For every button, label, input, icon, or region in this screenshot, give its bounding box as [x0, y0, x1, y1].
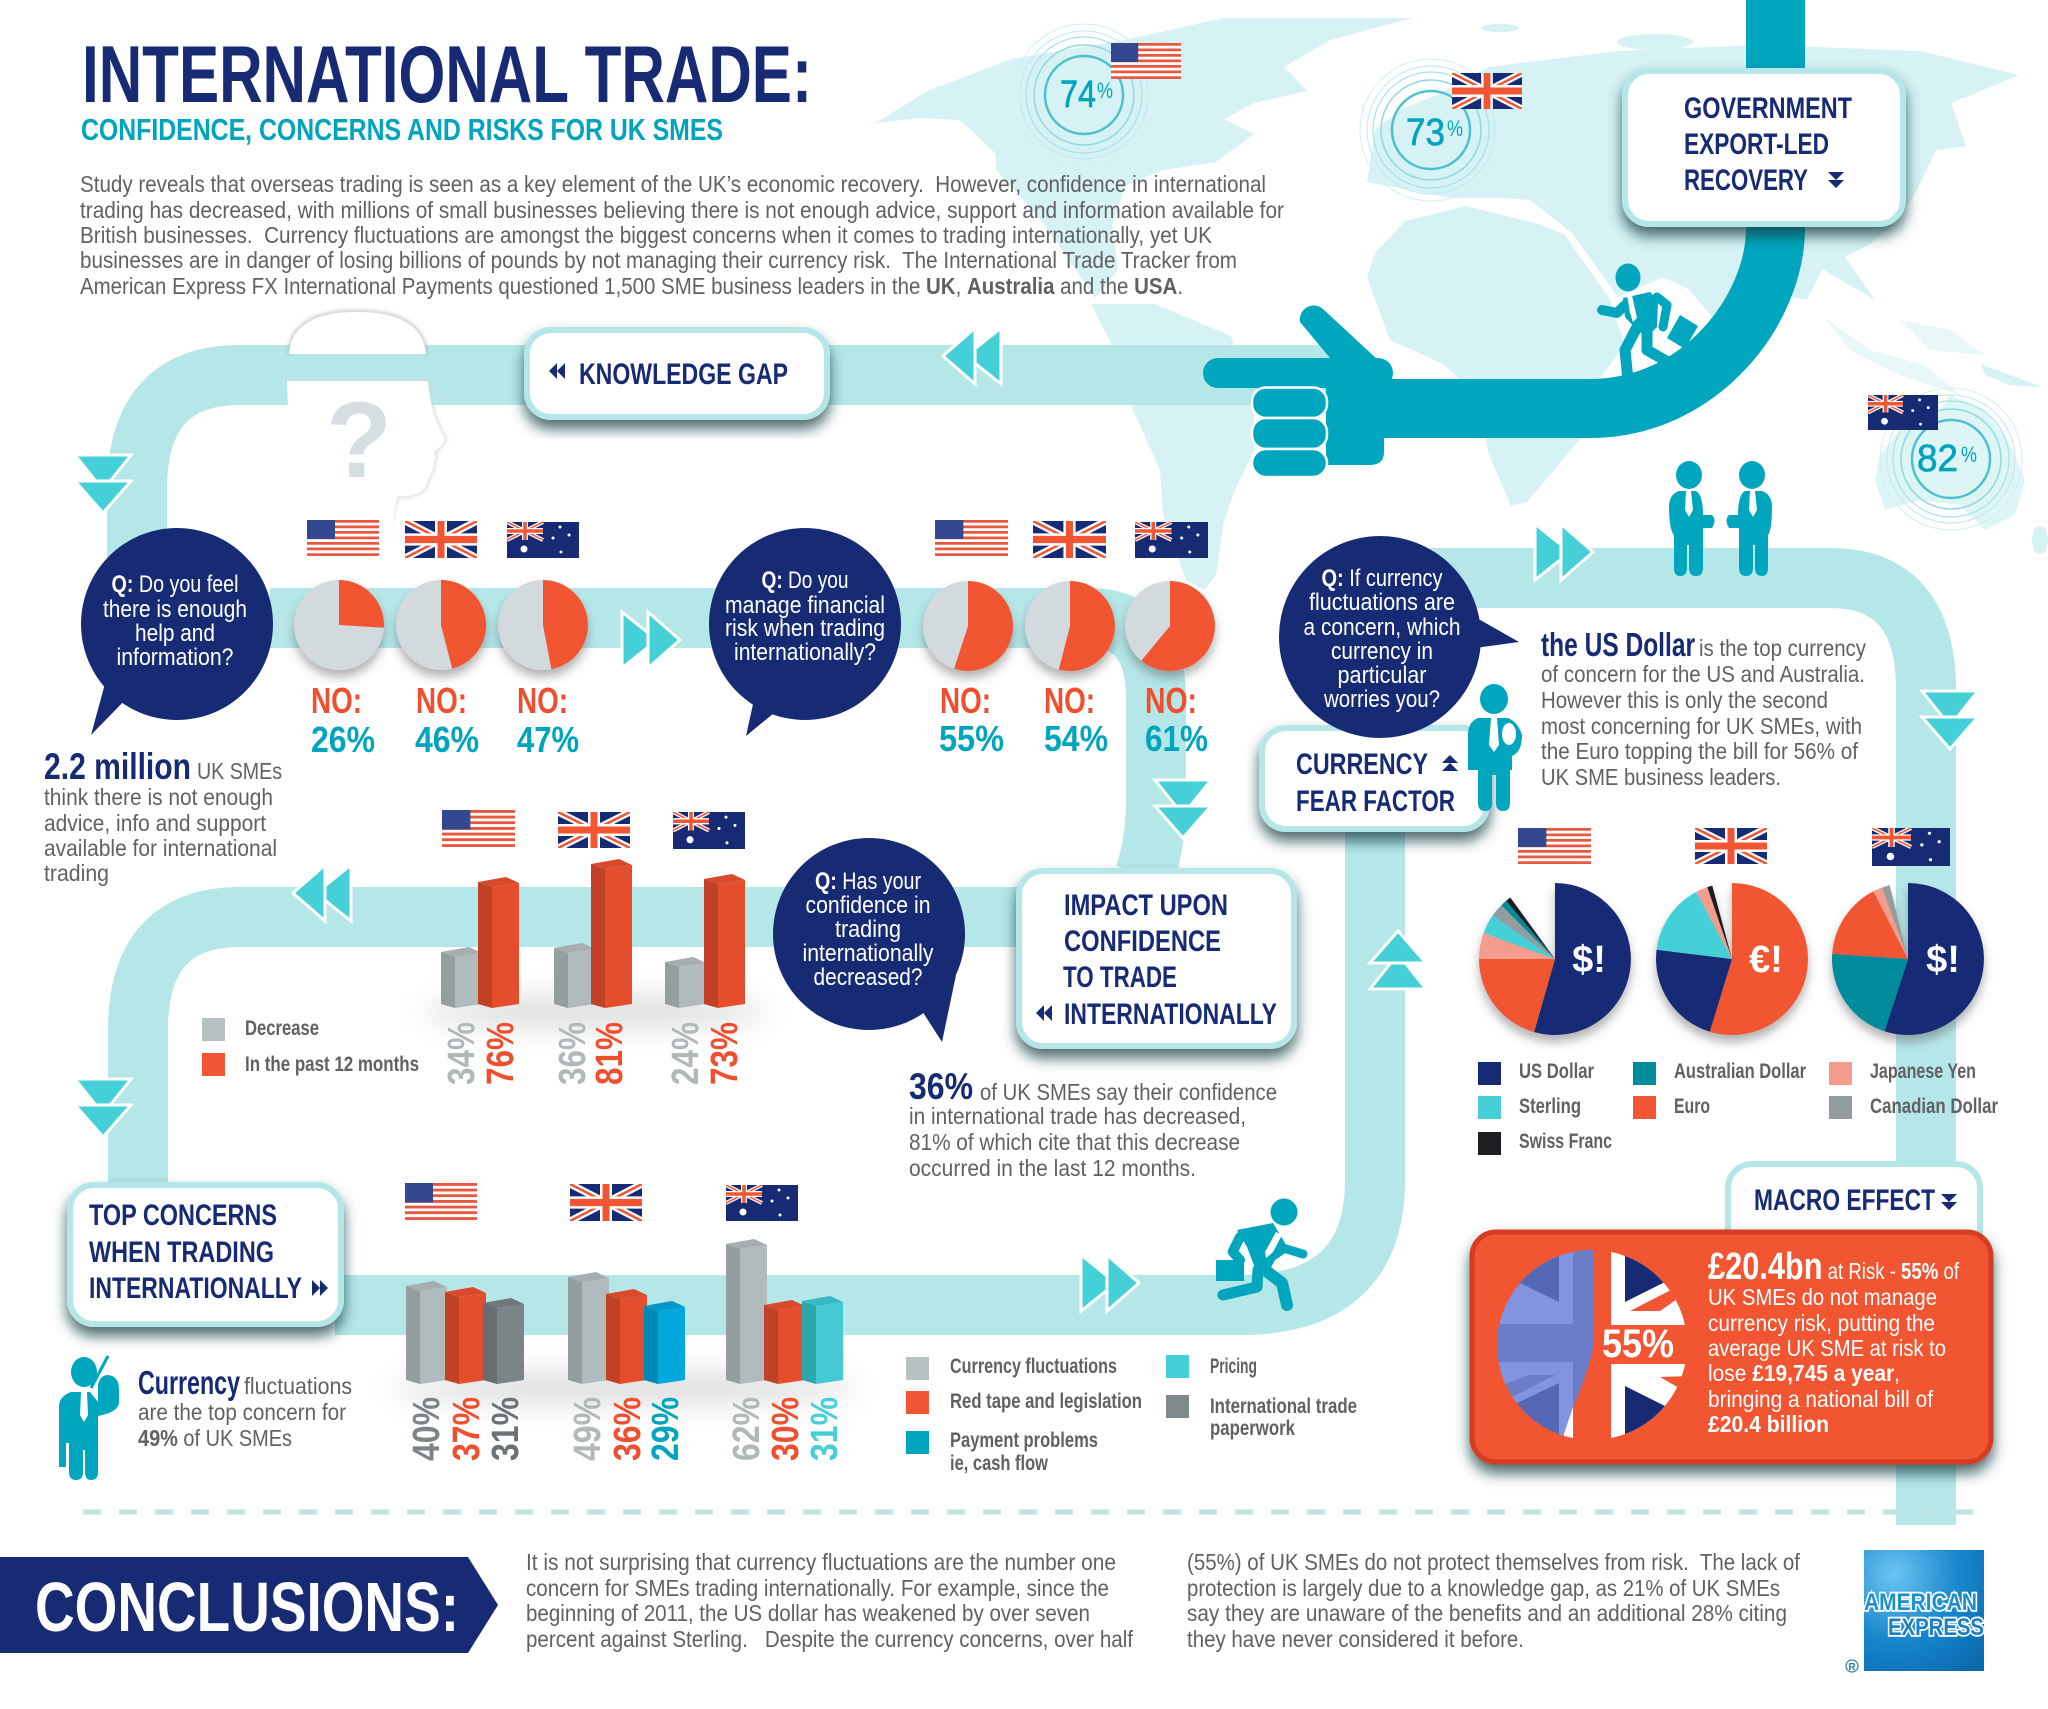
box: impact upon confidence	[1019, 871, 1294, 1046]
risk text: UK SMEs do not manage	[1708, 1284, 1937, 1310]
question bubble 1: information?	[116, 644, 234, 671]
pie chart: UK currencies: €!	[1749, 939, 1783, 981]
icon: man with raised hand	[1468, 684, 1522, 811]
values row 2: NO:	[1145, 680, 1197, 721]
legend: currencies	[1478, 1060, 1998, 1155]
arrows down left	[75, 455, 131, 513]
flag and stat: USA 74%: %	[1097, 78, 1113, 103]
question bubble 1: there is enough	[103, 596, 247, 623]
box: macro effect: MACRO EFFECT	[1754, 1184, 1935, 1217]
icon: head silhouette with question mark	[287, 312, 445, 570]
question bubble 4: fluctuations are	[1309, 589, 1455, 616]
bar values: confidence decrease: 36%	[552, 1022, 594, 1085]
text: currency fluctuations: fluctuations	[244, 1373, 352, 1399]
text: currency fluctuations: Currency	[138, 1364, 240, 1401]
intro text: American Express FX International Payments questioned 1,500 SME business leaders in the UK, Australia and the USA.	[80, 273, 1183, 299]
text: the US dollar: most concerning for UK SMEs, with	[1541, 713, 1862, 739]
risk text: bringing a national bill of	[1708, 1386, 1934, 1412]
flag and stat: Australia 82%	[1868, 388, 2022, 530]
flags row 1	[307, 520, 579, 558]
conclusions text right: say they are unaware of the benefits and an additional 28% citing	[1187, 1600, 1787, 1626]
box: currency fear factor	[1262, 728, 1487, 829]
arrows down, right side	[1922, 691, 1978, 749]
legend: currencies: Canadian Dollar	[1870, 1095, 1998, 1118]
intro text: Study reveals that overseas trading is seen as a key element of the UK’s economic recovery. However, confidence in international	[80, 171, 1266, 197]
bar values: top concerns: 29%	[645, 1397, 687, 1461]
question bubble 2: internationally?	[734, 639, 876, 666]
logo: American Express: EXPRESS	[1888, 1614, 1984, 1641]
text: 36% of UK SMEs: 36%	[909, 1066, 973, 1107]
box: top concerns: INTERNATIONALLY	[89, 1272, 302, 1305]
bar chart: confidence decrease	[420, 859, 770, 1026]
text: 2.2 million: advice, info and support	[44, 810, 267, 836]
question bubble 1: help and	[135, 620, 215, 647]
text: 2.2 million: trading	[44, 860, 109, 886]
question bubble 3: Q: Has your	[815, 868, 921, 895]
icon: running man with briefcase	[1216, 1198, 1303, 1305]
arrows down centre	[1155, 780, 1211, 838]
text: 2.2 million	[44, 746, 282, 886]
legend: currencies: Sterling	[1519, 1095, 1581, 1118]
box: top concerns: TOP CONCERNS	[89, 1199, 277, 1232]
box: knowledge gap	[527, 330, 827, 417]
pie chart: Australia currencies: $!	[1926, 939, 1960, 981]
text: 36% of UK SMEs: of UK SMEs say their confidence	[980, 1079, 1277, 1105]
question bubble 4	[1279, 536, 1519, 738]
text: currency fluctuations: are the top concern for	[138, 1399, 346, 1425]
text: 2.2 million: 2.2 million	[44, 746, 191, 787]
pie charts: manage risk	[923, 581, 1215, 671]
values row 2: NO:	[1044, 680, 1095, 721]
conclusions text right: protection is largely due to a knowledge gap, as 21% of UK SMEs	[1187, 1575, 1780, 1601]
question bubble 1	[81, 528, 273, 735]
legend: concerns: Payment problems	[950, 1429, 1098, 1452]
text: the US dollar: the US Dollar	[1541, 626, 1695, 663]
text: the US dollar: However this is only the second	[1541, 687, 1828, 713]
bar values: top concerns	[406, 1397, 846, 1461]
flag and stat: USA 74%	[1013, 24, 1181, 166]
conclusions text right: (55%) of UK SMEs do not protect themselves from risk. The lack of	[1187, 1549, 1801, 1575]
risk text: £20.4 billion	[1708, 1411, 1829, 1437]
legend: currencies: Swiss Franc	[1519, 1130, 1612, 1153]
pie charts: enough help	[294, 580, 588, 670]
flag and stat: USA 74%: 74	[1060, 74, 1096, 116]
flags row 3	[442, 810, 745, 849]
text: 2.2 million: available for international	[44, 835, 277, 861]
box: currency fear factor: FEAR FACTOR	[1296, 785, 1455, 818]
text: 36% of UK SMEs	[909, 1066, 1277, 1181]
text: 36% of UK SMEs: occurred in the last 12 months.	[909, 1155, 1196, 1181]
legend: confidence: Decrease	[245, 1017, 319, 1040]
conclusions text left: percent against Sterling. Despite the currency concerns, over half	[526, 1626, 1134, 1652]
text: 36% of UK SMEs: in international trade has decreased,	[909, 1103, 1246, 1129]
icon: two men shaking hands	[1669, 461, 1772, 576]
pie chart: USA currencies: $!	[1572, 939, 1606, 981]
values row 2: NO:	[940, 680, 991, 721]
question bubble 3: decreased?	[814, 964, 922, 991]
flags row 2	[935, 520, 1208, 558]
arrows left row 3	[293, 865, 351, 921]
legend: confidence	[202, 1017, 419, 1076]
question bubble 3	[773, 838, 965, 1042]
conclusions text left: concern for SMEs trading internationally. For example, since the	[526, 1575, 1109, 1601]
bar chart: top concerns	[390, 1239, 860, 1402]
values row 1: NO:	[311, 680, 362, 721]
box: impact upon confidence: INTERNATIONALLY	[1064, 998, 1277, 1031]
box: knowledge gap: KNOWLEDGE GAP	[579, 358, 788, 391]
question bubble 3: confidence in	[806, 892, 930, 919]
bar values: top concerns: 40%	[406, 1397, 448, 1461]
bar values: top concerns: 62%	[726, 1397, 768, 1461]
bar values: top concerns: 49%	[567, 1397, 609, 1461]
text: currency fluctuations: 49% of UK SMEs	[138, 1425, 292, 1451]
question bubble 4: currency in	[1331, 638, 1433, 665]
values row 2: 54%	[1044, 718, 1108, 759]
question bubble 2: manage financial	[725, 592, 885, 619]
intro text: businesses are in danger of losing billions of pounds by not managing their currency risk. The International Trade Tracker from	[80, 247, 1237, 273]
flags row 4	[405, 1183, 798, 1221]
panel: £20.4bn at risk	[1472, 1232, 1991, 1462]
values row 1: 26%	[311, 719, 375, 760]
conclusions text left: It is not surprising that currency fluctuations are the number one	[526, 1549, 1116, 1575]
risk text	[1708, 1246, 1959, 1437]
values row 1: NO:	[416, 680, 467, 721]
logo: American Express	[1846, 1550, 1984, 1673]
flag and stat: UK 73%: 73	[1406, 112, 1445, 154]
flag and stat: Australia 82%: %	[1961, 442, 1977, 467]
banner: conclusions: CONCLUSIONS:	[35, 1568, 459, 1646]
box: government export-led recovery: RECOVERY	[1684, 164, 1808, 197]
question bubble 4: worries you?	[1323, 686, 1440, 713]
flag and stat: UK 73%: %	[1447, 116, 1463, 141]
icon: pointing hand	[1203, 0, 1776, 477]
bar values: confidence decrease: 73%	[704, 1022, 746, 1085]
question bubble 4: Q: If currency	[1322, 565, 1442, 592]
conclusions text left: beginning of 2011, the US dollar has weakened by over seven	[526, 1600, 1090, 1626]
intro text: trading has decreased, with millions of small businesses believing there is not enough advice, support and information available for	[80, 197, 1284, 223]
text: the US dollar	[1541, 626, 1866, 790]
pie chart: USA currencies	[1479, 883, 1631, 1035]
question bubble 2	[709, 528, 901, 736]
box: impact upon confidence: IMPACT UPON	[1064, 889, 1228, 922]
banner: conclusions	[0, 1557, 498, 1653]
pale path band	[137, 375, 1926, 1525]
text: the US dollar: is the top currency	[1699, 635, 1866, 661]
legend: currencies: Australian Dollar	[1674, 1060, 1806, 1083]
values row 2	[939, 680, 1208, 759]
icon: head silhouette with question mark: ?	[326, 379, 392, 500]
box: government export-led recovery	[1625, 71, 1903, 224]
arrows along top band	[943, 328, 1001, 384]
flag and stat: UK 73%	[1360, 59, 1522, 201]
logo: American Express: R	[1848, 1662, 1856, 1673]
values row 1	[311, 680, 579, 760]
conclusions text left	[526, 1549, 1134, 1652]
background world map	[875, 18, 2048, 590]
text: the US dollar: UK SME business leaders.	[1541, 764, 1781, 790]
box: top concerns	[70, 1185, 341, 1324]
bar values: top concerns: 36%	[607, 1397, 649, 1461]
box: currency fear factor: CURRENCY	[1296, 748, 1428, 781]
conclusions text right: they have never considered it before.	[1187, 1626, 1524, 1652]
question bubble 4: a concern, which	[1304, 614, 1460, 641]
risk text: lose £19,745 a year,	[1708, 1360, 1900, 1386]
flag and stat: Australia 82%: 82	[1917, 438, 1958, 480]
box: impact upon confidence: CONFIDENCE	[1064, 925, 1221, 958]
box: impact upon confidence: TO TRADE	[1063, 961, 1177, 994]
box: government export-led recovery: GOVERNMENT	[1684, 92, 1852, 125]
risk text: currency risk, putting the	[1708, 1310, 1935, 1336]
text: 36% of UK SMEs: 81% of which cite that this decrease	[909, 1129, 1240, 1155]
arrows down, left lower	[75, 1079, 131, 1137]
pie chart: 55% union flag	[1497, 1250, 1690, 1440]
box: top concerns: WHEN TRADING	[89, 1236, 274, 1269]
bar values: top concerns: 37%	[446, 1397, 488, 1461]
values row 1: NO:	[517, 680, 568, 721]
icon: man with pointer	[59, 1356, 119, 1480]
question bubble 2: risk when trading	[725, 615, 885, 642]
flags currency pies	[1518, 828, 1950, 866]
pie chart: 55% union flag: 55%	[1602, 1322, 1674, 1366]
pie chart: UK currencies	[1656, 883, 1808, 1035]
legend: concerns: Red tape and legislation	[950, 1390, 1142, 1413]
legend: concerns: International trade	[1210, 1395, 1357, 1418]
question bubble 4: particular	[1338, 662, 1426, 689]
question bubble 2: Q: Do you	[762, 567, 848, 594]
icon: small business man running on arm	[1602, 264, 1698, 380]
intro text	[80, 171, 1284, 299]
bar values: top concerns: 31%	[485, 1397, 527, 1461]
bar values: confidence decrease: 81%	[589, 1022, 631, 1085]
legend: concerns: Pricing	[1210, 1355, 1257, 1378]
title: INTERNATIONAL TRADE:	[82, 30, 812, 120]
arrows up, centre	[1370, 931, 1426, 989]
legend: currencies: US Dollar	[1519, 1060, 1594, 1083]
text: the US dollar: of concern for the US and Australia.	[1541, 661, 1865, 687]
arrows right, upper right	[1535, 524, 1593, 580]
bar values: top concerns: 31%	[804, 1397, 846, 1461]
bar values: confidence decrease: 24%	[665, 1022, 707, 1085]
question bubble 3: trading	[835, 916, 901, 943]
text: 2.2 million: think there is not enough	[44, 784, 273, 810]
dashed divider	[83, 1510, 1981, 1514]
risk text: average UK SME at risk to	[1708, 1335, 1946, 1361]
legend: currencies: Euro	[1674, 1095, 1710, 1118]
text: 2.2 million: UK SMEs	[197, 758, 282, 784]
legend: concerns: paperwork	[1210, 1417, 1295, 1440]
bar values: top concerns: 30%	[765, 1397, 807, 1461]
text: currency fluctuations	[138, 1364, 352, 1451]
arrows right row 4	[1081, 1255, 1139, 1311]
conclusions text right	[1187, 1549, 1801, 1652]
box: government export-led recovery: EXPORT-LED	[1684, 128, 1829, 161]
question bubble 3: internationally	[802, 940, 934, 967]
box: macro effect	[1728, 1164, 1980, 1254]
subtitle: CONFIDENCE, CONCERNS AND RISKS FOR UK SMES	[81, 112, 723, 147]
values row 1: 47%	[517, 719, 579, 760]
legend: concerns	[906, 1355, 1357, 1475]
risk text: £20.4bn at Risk - 55% of	[1708, 1246, 1959, 1288]
legend: currencies: Japanese Yen	[1870, 1060, 1976, 1083]
logo: American Express: AMERICAN	[1864, 1589, 1977, 1616]
bar values: confidence decrease	[441, 1022, 746, 1085]
values row 2: 61%	[1145, 718, 1208, 759]
legend: concerns: ie, cash flow	[950, 1452, 1049, 1475]
arrows right row 2	[622, 612, 680, 668]
values row 1: 46%	[415, 719, 479, 760]
legend: confidence: In the past 12 months	[245, 1053, 419, 1076]
legend: concerns: Currency fluctuations	[950, 1355, 1117, 1378]
bar values: confidence decrease: 76%	[480, 1022, 522, 1085]
pie chart: Australia currencies	[1832, 883, 1984, 1035]
question bubble 1: Q: Do you feel	[112, 571, 238, 598]
values row 2: 55%	[939, 718, 1004, 759]
intro text: British businesses. Currency fluctuations are amongst the biggest concerns when it comes to trading internationally, yet UK	[80, 222, 1213, 248]
text: the US dollar: the Euro topping the bill for 56% of	[1541, 738, 1859, 764]
bar values: confidence decrease: 34%	[441, 1022, 483, 1085]
